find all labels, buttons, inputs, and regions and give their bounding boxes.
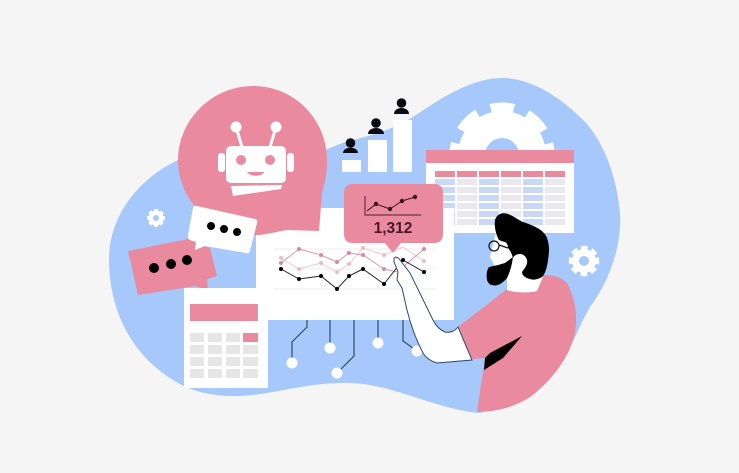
icon: person 1 [343,138,358,153]
icon: large gear [450,102,554,150]
white chat bubble [188,206,257,253]
chart panel [256,208,454,320]
robot speech bubble [178,86,327,235]
value: 1,312 [374,220,412,237]
dark pink line [279,247,426,272]
black line [279,258,426,291]
icon: person 2 [368,118,384,134]
beard [487,257,513,286]
hair [495,213,549,280]
mini line chart [365,195,421,215]
icon: small gear right [568,245,600,277]
blue background blob [109,78,620,413]
pink chat bubble [128,238,217,295]
data table [426,150,574,233]
bar chart with people [342,98,412,172]
arm and hand [394,257,472,363]
callout with value [344,184,443,253]
man pointing at chart [394,213,576,412]
glasses [489,241,508,251]
neck and face [490,228,543,292]
icon: small gear left [147,209,165,227]
shirt [458,275,576,412]
armpit shadow [484,336,522,370]
icon: person 3 [394,98,409,114]
calendar [184,288,268,388]
infographic illustration [109,78,620,413]
icon: robot [218,122,294,196]
light pink line [279,246,426,274]
connector lines with nodes [286,320,422,378]
